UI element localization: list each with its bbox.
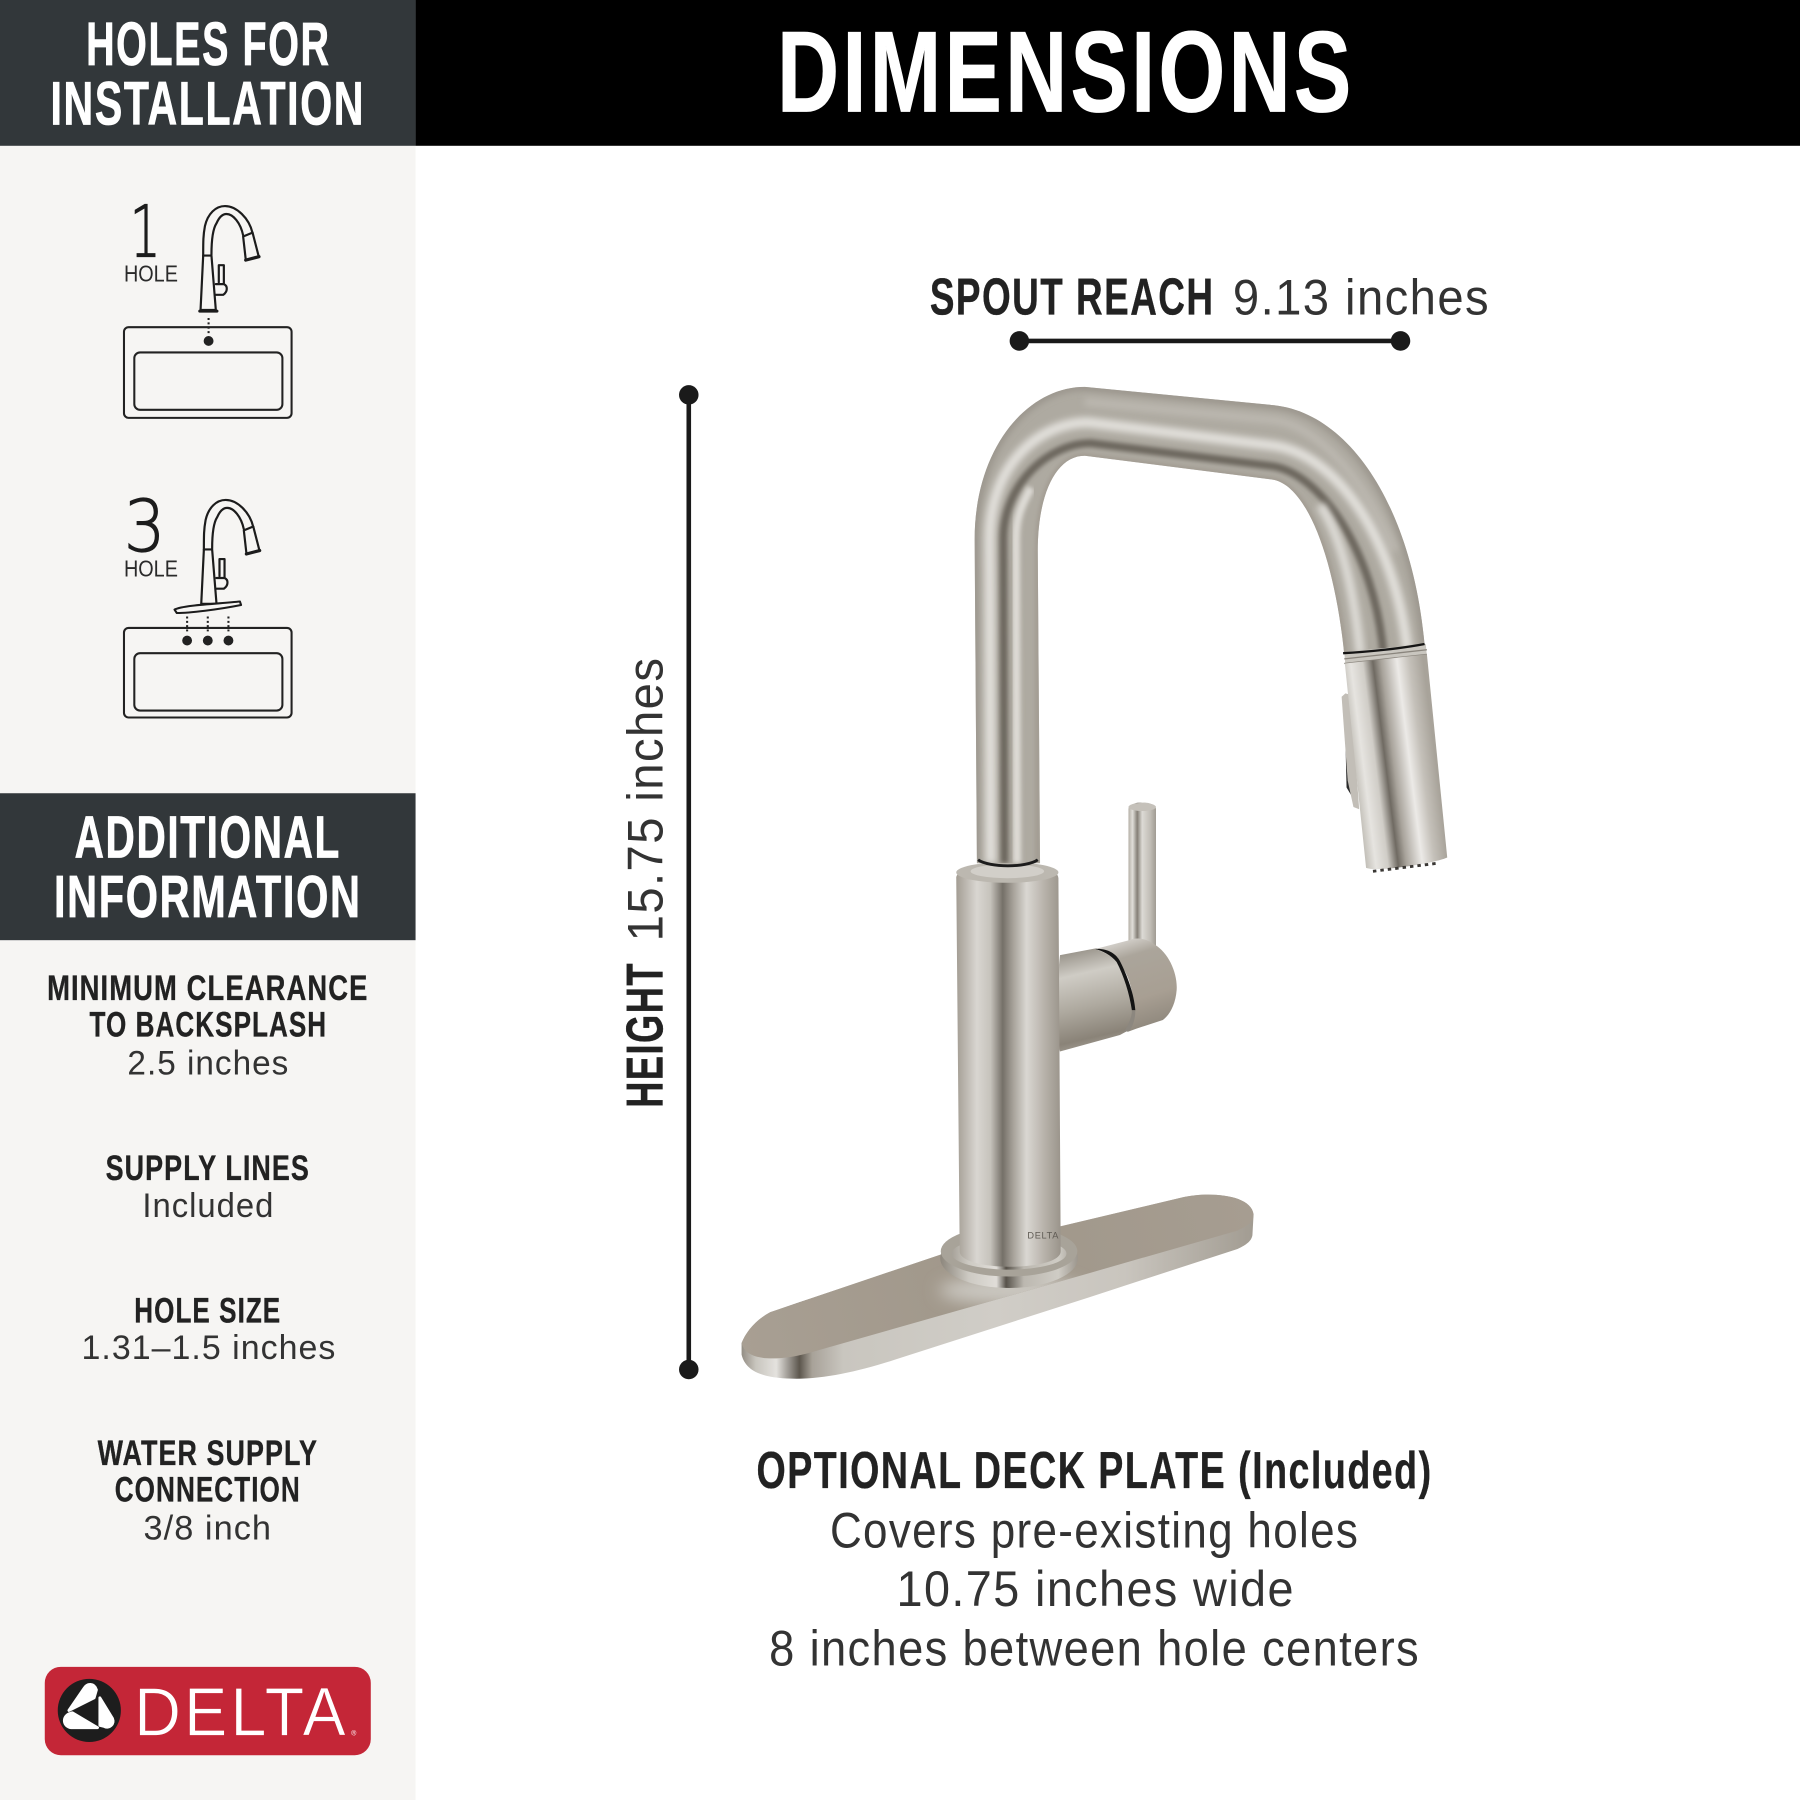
icon: three hole installation: 3 [124,485,165,568]
dimension: spout reach: 9.13 inches [1233,269,1490,326]
dimension: spout reach [930,268,1490,351]
text block: water supply connection: CONNECTION [115,1470,301,1510]
text block: hole size: HOLE SIZE [134,1290,281,1330]
text block: optional deck plate [757,1441,1433,1677]
arrow: height line [679,385,699,1379]
banner: additional information heading: ADDITIONAL [75,804,341,871]
dimension: height: HEIGHT [615,962,673,1108]
text block: supply lines [106,1148,310,1225]
faucet base flange [940,1226,1078,1288]
panel: left sidebar background [0,0,416,1800]
text block: minimum clearance [47,968,368,1082]
text block: hole size: 1.31–1.5 inches [82,1329,336,1367]
deck plate [742,1195,1254,1379]
dimension: height [615,385,699,1379]
faucet body: DELTA [1027,1231,1059,1241]
collar ring at spout base [978,860,1038,866]
text block: optional deck plate: OPTIONAL DECK PLATE (Included) [757,1441,1433,1499]
icon: mini faucet one [200,206,259,311]
banner: holes for installation heading: INSTALLATION [51,70,365,138]
spout tube [975,387,1425,866]
text block: optional deck plate: Covers pre-existing holes [830,1501,1359,1558]
text block: optional deck plate: 8 inches between hole centers [769,1620,1420,1677]
text block: minimum clearance: 2.5 inches [127,1044,289,1082]
icon: one hole installation [124,191,292,418]
faucet body [956,862,1061,1267]
pull-down spray head [1342,644,1447,871]
text block: water supply connection: 3/8 inch [143,1509,272,1547]
dimension: height: 15.75 inches [616,657,673,941]
text block: water supply connection [98,1433,318,1547]
arrow: spout reach line [1010,331,1410,351]
text block: supply lines: SUPPLY LINES [106,1148,310,1188]
banner: holes for installation heading: HOLES FOR [86,10,331,78]
faucet handle [1057,802,1177,1052]
dimension: spout reach: SPOUT REACH [930,268,1215,326]
icon: one hole installation: HOLE [124,260,178,286]
banner: holes for installation heading [0,0,416,146]
title: dimensions: DIMENSIONS [777,8,1355,136]
text block: minimum clearance: MINIMUM CLEARANCE [47,968,368,1008]
logo: delta: DELTA [134,1674,349,1751]
icon: three hole installation [124,485,292,717]
icon: three hole installation: HOLE [124,555,178,581]
logo: delta: ® [351,1730,356,1738]
banner: additional information heading [0,793,416,940]
logo: delta [45,1667,371,1755]
banner: additional information heading: INFORMATION [54,863,362,930]
icon: one hole installation: 1 [130,191,161,274]
text block: optional deck plate: 10.75 inches wide [897,1560,1295,1617]
text block: water supply connection: WATER SUPPLY [98,1433,318,1473]
banner: dimensions header [416,0,1800,146]
text block: supply lines: Included [142,1187,274,1225]
icon: mini faucet three [201,500,260,604]
text block: hole size [82,1290,336,1367]
text block: minimum clearance: TO BACKSPLASH [90,1005,327,1045]
illustration: kitchen faucet with deck plate [742,387,1447,1379]
